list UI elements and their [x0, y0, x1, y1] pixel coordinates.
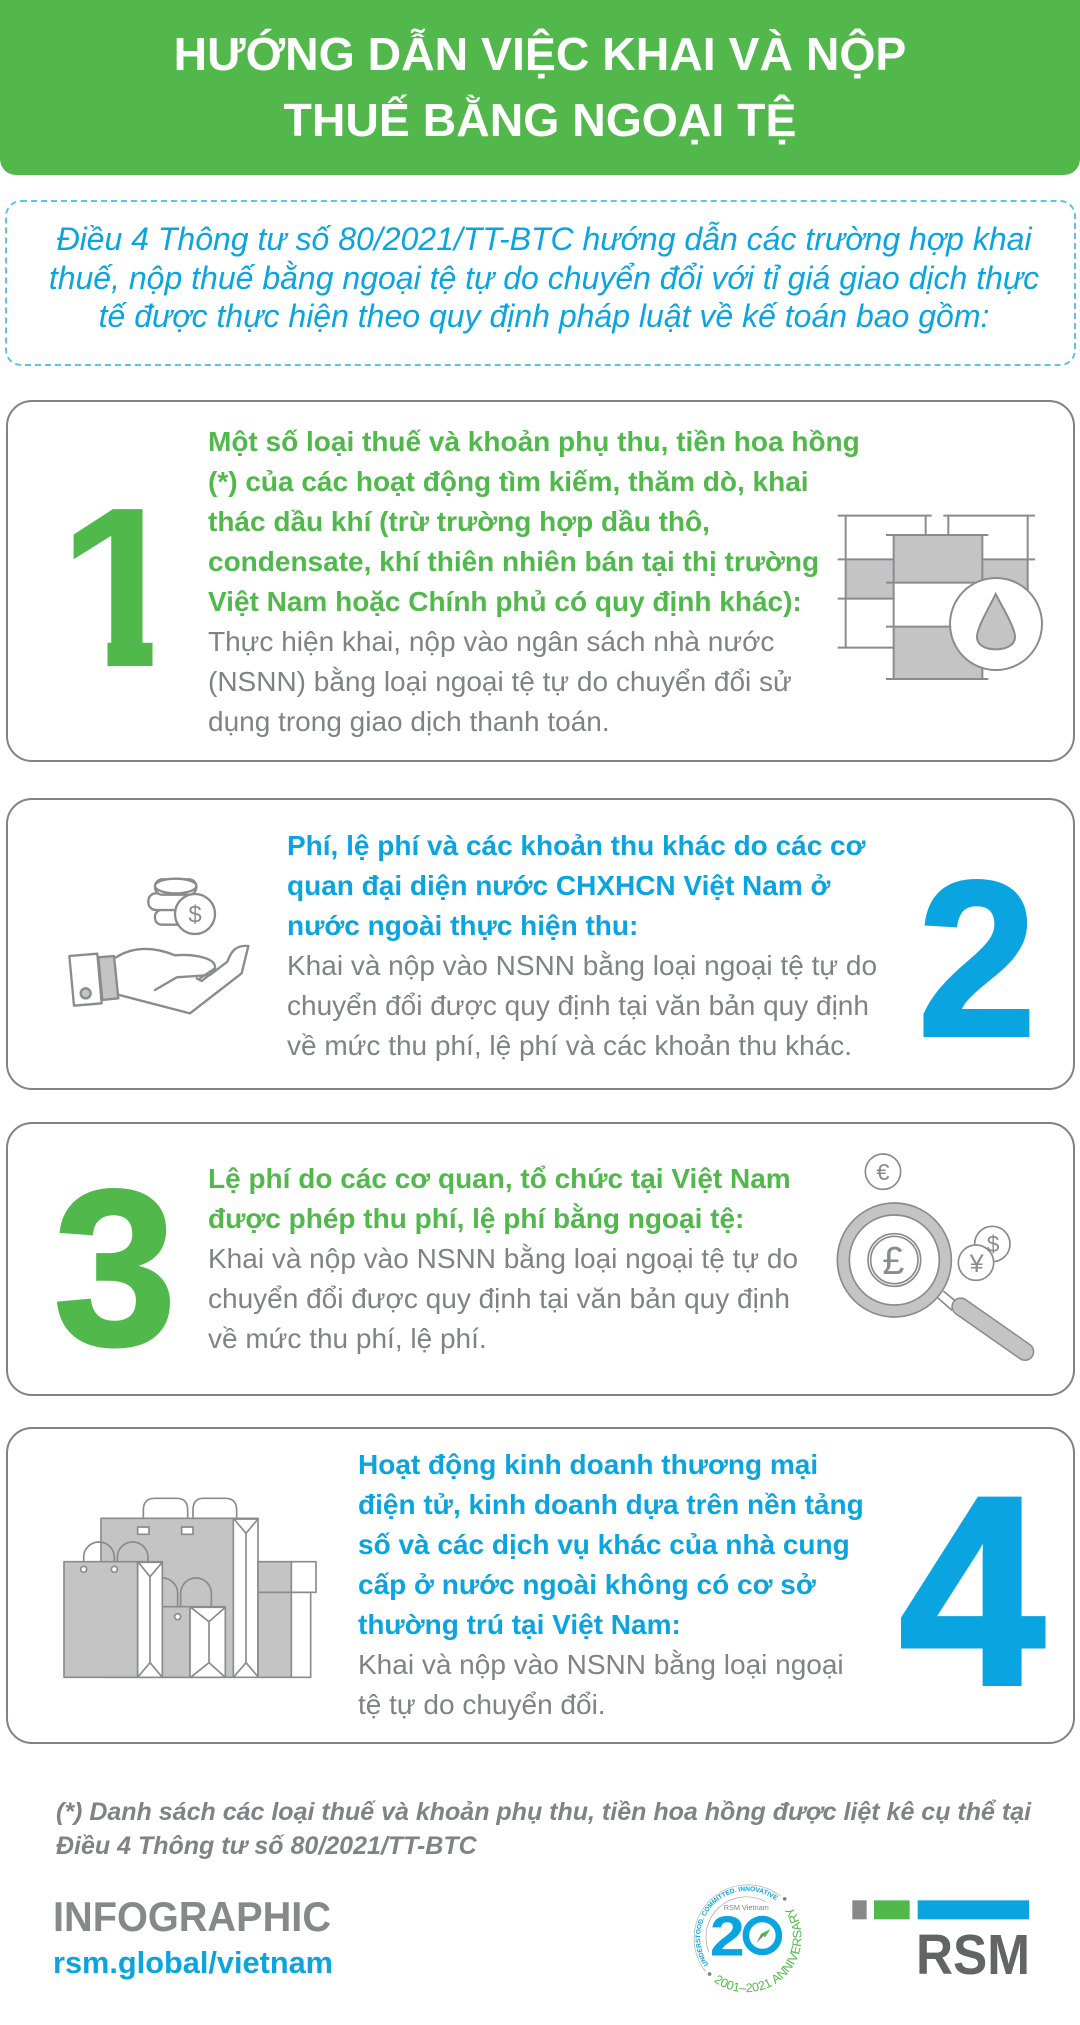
intro text: Điều 4 Thông tư số 80/2021/TT-BTC hướng dẫn các trường hợp khai [56, 221, 1032, 257]
panel 4 text: điện tử, kinh doanh dựa trên nền tảng [358, 1489, 864, 1520]
panel 1 text: Một số loại thuế và khoản phụ thu, tiền hoa hồng [208, 426, 860, 457]
panel 4 text: Khai và nộp vào NSNN bằng loại ngoại [358, 1649, 844, 1680]
panel 4 text: tệ tự do chuyển đổi. [358, 1689, 606, 1720]
title text [174, 28, 906, 146]
anniversary badge: 2001–2021 ANNIVERSARY [714, 1909, 802, 1992]
number 3: 3 [54, 1144, 176, 1392]
icon: magnifier and currency coins: £ [882, 1239, 904, 1283]
intro text [49, 221, 1039, 334]
anniversary badge: RSM Vietnam [723, 1902, 768, 1911]
panel 3 text: được phép thu phí, lệ phí bằng ngoại tệ: [208, 1203, 744, 1234]
intro callout: dashed box [5, 200, 1076, 366]
panel 2 text: Khai và nộp vào NSNN bằng loại ngoại tệ tự do [287, 950, 877, 981]
panel 1 text: condensate, khí thiên nhiên bán tại thị trường [208, 546, 819, 577]
panel 3 text: chuyển đổi được quy định tại văn bản quy định [208, 1283, 790, 1314]
panel 2 [6, 798, 1075, 1090]
panel 2 text: nước ngoài thực hiện thu: [287, 910, 638, 941]
title banner [0, 0, 1080, 175]
panel 2 text: chuyển đổi được quy định tại văn bản quy định [287, 990, 869, 1021]
panel 3 text [208, 1163, 798, 1354]
footnote: (*) Danh sách các loại thuế và khoản phụ thu, tiền hoa hồng được liệt kê cụ thể tại [56, 1798, 1031, 1826]
intro text: tế được thực hiện theo quy định pháp luật về kế toán bao gồm: [99, 298, 989, 334]
panel 2 text: về mức thu phí, lệ phí và các khoản thu khác. [287, 1030, 852, 1061]
icon: oil barrels [838, 514, 1043, 680]
number 4: 4 [900, 1440, 1046, 1740]
number 1: 1 [58, 461, 185, 715]
panel 4 frame [6, 1427, 1075, 1744]
title text: THUẾ BẰNG NGOẠI TỆ [284, 94, 796, 146]
panel 1 text: dụng trong giao dịch thanh toán. [208, 706, 610, 737]
panel 1 text: (NSNN) bằng loại ngoại tệ tự do chuyển đổi sử [208, 666, 792, 697]
panel 1 text: Thực hiện khai, nộp vào ngân sách nhà nước [208, 626, 774, 657]
panel 3 [6, 1122, 1075, 1396]
footer label: INFOGRAPHIC and website: INFOGRAPHIC [53, 1893, 331, 1940]
RSM logo: RSM [916, 1924, 1030, 1987]
icon: magnifier and currency coins: ¥ [969, 1250, 985, 1278]
panel 3 text: Lệ phí do các cơ quan, tổ chức tại Việt Nam [208, 1163, 791, 1194]
panel 1 text [208, 426, 860, 737]
panel 4 text [358, 1449, 864, 1720]
icon: hand with coins: $ [188, 902, 202, 929]
icon: hand with coins [68, 878, 250, 1014]
panel 4 text: cấp ở nước ngoài không có cơ sở [358, 1569, 816, 1600]
panel 3 frame [6, 1122, 1075, 1396]
anniversary badge: 2 [709, 1905, 744, 1968]
footer label: INFOGRAPHIC and website [53, 1893, 333, 1980]
panel 4 text: số và các dịch vụ khác của nhà cung [358, 1529, 850, 1560]
panel 1 [6, 400, 1075, 762]
panel 3 text: Khai và nộp vào NSNN bằng loại ngoại tệ tự do [208, 1243, 798, 1274]
icon: shopping bags and box [63, 1498, 317, 1678]
panel 1 text: thác dầu khí (trừ trường hợp dầu thô, [208, 506, 710, 537]
intro text: thuế, nộp thuế bằng ngoại tệ tự do chuyển đổi với tỉ giá giao dịch thực [49, 260, 1039, 296]
panel 2 frame [6, 798, 1075, 1090]
icon: magnifier and currency coins: $ [987, 1231, 1000, 1257]
panel 2 text [287, 830, 877, 1061]
panel 1 frame [6, 400, 1075, 762]
panel 1 text: (*) của các hoạt động tìm kiếm, thăm dò, khai [208, 466, 809, 497]
icon: magnifier and currency coins: € [877, 1159, 890, 1185]
panel 1 text: Việt Nam hoặc Chính phủ có quy định khác): [208, 586, 802, 617]
panel 4 text: thường trú tại Việt Nam: [358, 1609, 681, 1640]
title text: HƯỚNG DẪN VIỆC KHAI VÀ NỘP [174, 28, 906, 80]
anniversary badge: UNDERSTOOD. COMMITTED. INNOVATIVE [696, 1886, 778, 1966]
footnote [56, 1798, 1032, 1860]
footer label: INFOGRAPHIC and website: rsm.global/vietnam [53, 1945, 333, 1980]
panel 2 text: quan đại diện nước CHXHCN Việt Nam ở [287, 870, 830, 901]
number 2: 2 [918, 836, 1036, 1084]
panel 3 text: về mức thu phí, lệ phí. [208, 1323, 487, 1354]
icon: magnifier and currency coins [836, 1153, 1034, 1361]
RSM logo [852, 1900, 1030, 1987]
footnote: Điều 4 Thông tư số 80/2021/TT-BTC [56, 1832, 477, 1860]
panel 2 text: Phí, lệ phí và các khoản thu khác do các cơ [287, 830, 866, 861]
panel 4 text: Hoạt động kinh doanh thương mại [358, 1449, 818, 1480]
anniversary badge [694, 1884, 802, 1992]
